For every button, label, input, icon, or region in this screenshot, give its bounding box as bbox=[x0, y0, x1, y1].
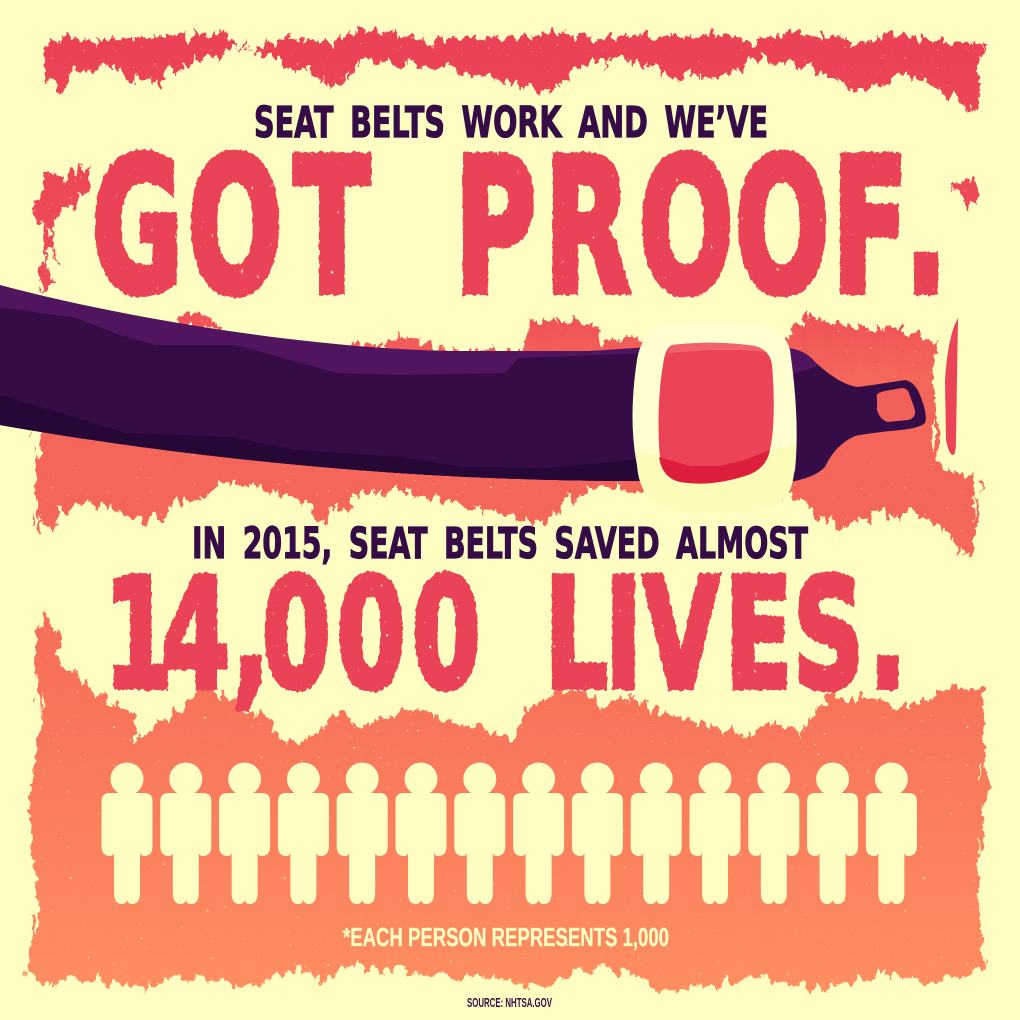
footnote: *EACH PERSON REPRESENTS 1,000 bbox=[343, 922, 669, 952]
headline: 14,000 lives: 14,000 bbox=[104, 547, 481, 724]
headline: 14,000 lives: LIVES. bbox=[545, 547, 907, 724]
grunge texture: right patch bbox=[950, 173, 980, 208]
pictogram: 14 people bbox=[102, 763, 917, 904]
grunge texture: left patch bbox=[35, 165, 88, 292]
grunge texture: middle band bbox=[35, 313, 978, 558]
headline: got proof: PROOF. bbox=[455, 119, 947, 335]
seat belt tongue bbox=[785, 348, 926, 483]
headline: got proof: GOT bbox=[92, 119, 370, 335]
buckle frame bbox=[632, 324, 797, 512]
headline: got proof bbox=[92, 119, 947, 335]
grunge texture: top band bbox=[42, 27, 983, 113]
headline: 14,000 lives bbox=[104, 547, 907, 724]
source: SOURCE: NHTSA.GOV bbox=[467, 995, 552, 1010]
buckle receiver sliver bbox=[945, 318, 958, 455]
buckle window bbox=[658, 343, 774, 484]
heading: seat belts work: SEAT BELTS WORK AND WE’VE bbox=[254, 98, 768, 148]
grunge texture: small patch above belt bbox=[177, 313, 223, 330]
grunge texture: bottom band bbox=[27, 613, 985, 993]
seat belt strap bbox=[0, 285, 650, 481]
tongue slot bbox=[877, 388, 915, 422]
